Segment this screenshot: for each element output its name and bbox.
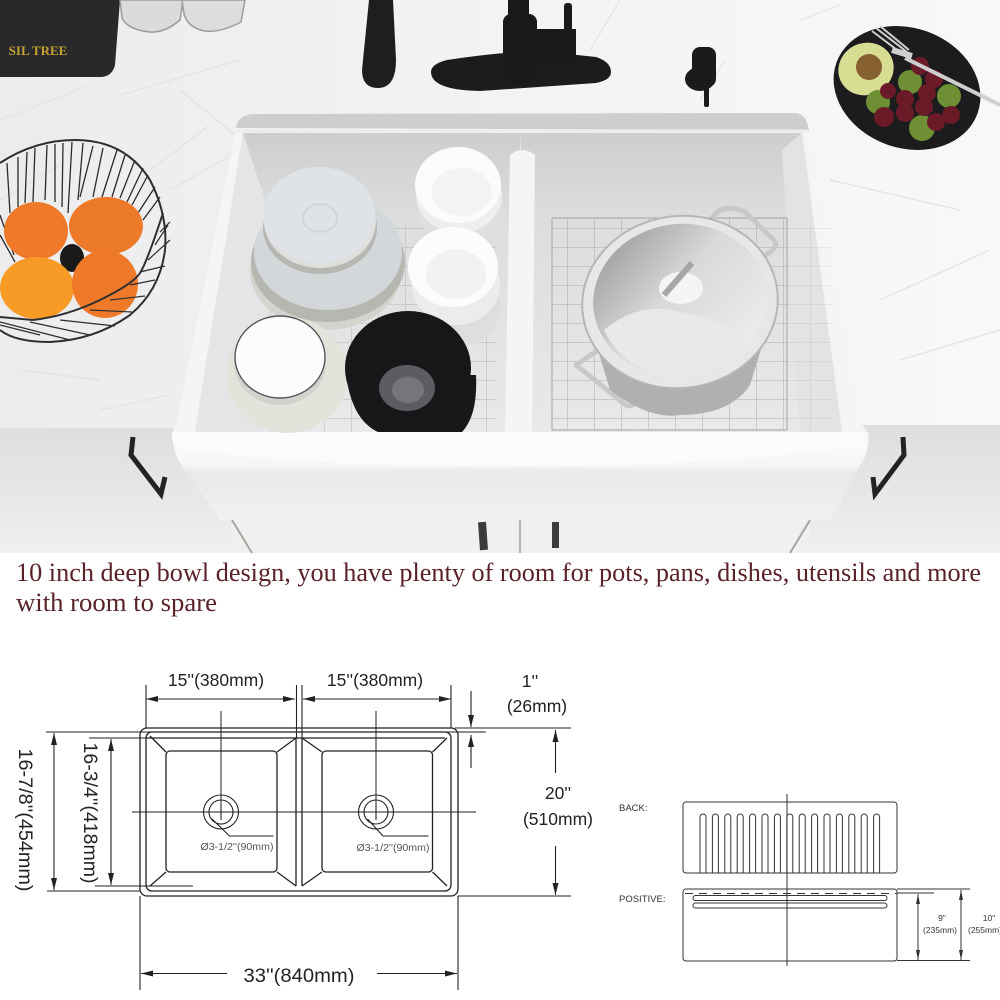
right drain (358, 795, 428, 836)
grid dimension labels: 9" (938, 913, 946, 923)
grid side views diagram (619, 794, 1000, 966)
back label: BACK: (619, 803, 648, 814)
greens (866, 70, 961, 141)
basket gap (60, 244, 84, 272)
pot handles (576, 208, 776, 406)
product photo: kitchen sink scene (0, 0, 1000, 553)
avocado (830, 34, 902, 104)
right cabinet handle (873, 437, 904, 494)
right bowl (302, 738, 447, 886)
white bowl stack middle (408, 227, 501, 346)
rim and front wires (0, 140, 170, 342)
sink dimension diagram (14, 670, 593, 990)
dimension labels: 1'' (522, 671, 538, 691)
faucet deck plate (431, 51, 611, 91)
pot body (592, 320, 770, 416)
farmhouse sink (172, 113, 868, 520)
lid knob (659, 263, 703, 304)
bag label: SIL TREE (9, 43, 67, 58)
left drain (204, 795, 274, 836)
left cabinet (0, 428, 250, 553)
dimension labels: 33''(840mm) (244, 965, 354, 987)
pull-down sprayer (362, 0, 396, 88)
dimension arrows (54, 691, 556, 974)
dishes in left basin (226, 147, 503, 433)
black bowl stack (345, 311, 476, 432)
right cabinet (790, 425, 1000, 553)
soap dispenser (685, 47, 716, 107)
fruit basket (0, 140, 170, 342)
dimension labels: 20'' (545, 783, 571, 803)
dimension labels: 16-3/4''(418mm) (79, 742, 101, 884)
cream dish with bowl (226, 316, 348, 433)
divider (505, 150, 535, 432)
cherries (874, 57, 960, 131)
back wires (0, 142, 160, 262)
caption (16, 557, 981, 617)
fork (872, 26, 1000, 105)
back view (683, 802, 897, 873)
glass lid (583, 213, 777, 387)
positive label: POSITIVE: (619, 894, 665, 905)
dimension labels: (26mm) (507, 696, 567, 716)
centre cabinet doors (232, 518, 810, 553)
dimension labels: 16-7/8''(454mm) (14, 748, 36, 892)
left basin (195, 133, 520, 432)
grid dimension labels (923, 913, 1000, 935)
drain labels: Ø3-1/2''(90mm) (200, 842, 274, 853)
marble countertop (0, 0, 1000, 430)
tin cans (120, 0, 245, 32)
front lip highlight (174, 432, 868, 466)
left bowl (150, 736, 296, 886)
plate stack (250, 167, 405, 330)
drain labels: Ø3-1/2''(90mm) (356, 843, 430, 854)
caption line 2: with room to spare (16, 587, 217, 617)
drain labels (200, 842, 430, 854)
oranges (0, 197, 143, 319)
faucet body (503, 0, 576, 82)
pot rim (571, 203, 789, 401)
sink outline top view (140, 728, 458, 896)
sink rim (172, 113, 868, 440)
caption line 1: 10 inch deep bowl design, you have plenty of room for pots, pans, dishes, utensils and more (16, 557, 981, 587)
coffee bag (0, 0, 120, 77)
rim top band (236, 113, 809, 130)
dimension labels: 15''(380mm) (327, 670, 423, 690)
sink apron (172, 432, 868, 520)
centre lines (132, 711, 476, 812)
dimension labels (14, 670, 593, 987)
positive view (683, 889, 897, 961)
grid dimension lines (897, 889, 970, 960)
left cabinet handle (131, 437, 165, 494)
dimension labels: (510mm) (523, 809, 593, 829)
white bowl stack top (415, 147, 503, 248)
grid dimension labels: 10" (983, 913, 995, 923)
right basin (520, 133, 842, 432)
extension lines (46, 685, 571, 990)
plate of food (816, 6, 1000, 170)
black plate (816, 6, 998, 170)
centre line (786, 794, 788, 966)
stainless steel pot (571, 203, 789, 416)
dimension labels: 15''(380mm) (168, 670, 264, 690)
grid dimension labels: (235mm) (923, 925, 957, 935)
